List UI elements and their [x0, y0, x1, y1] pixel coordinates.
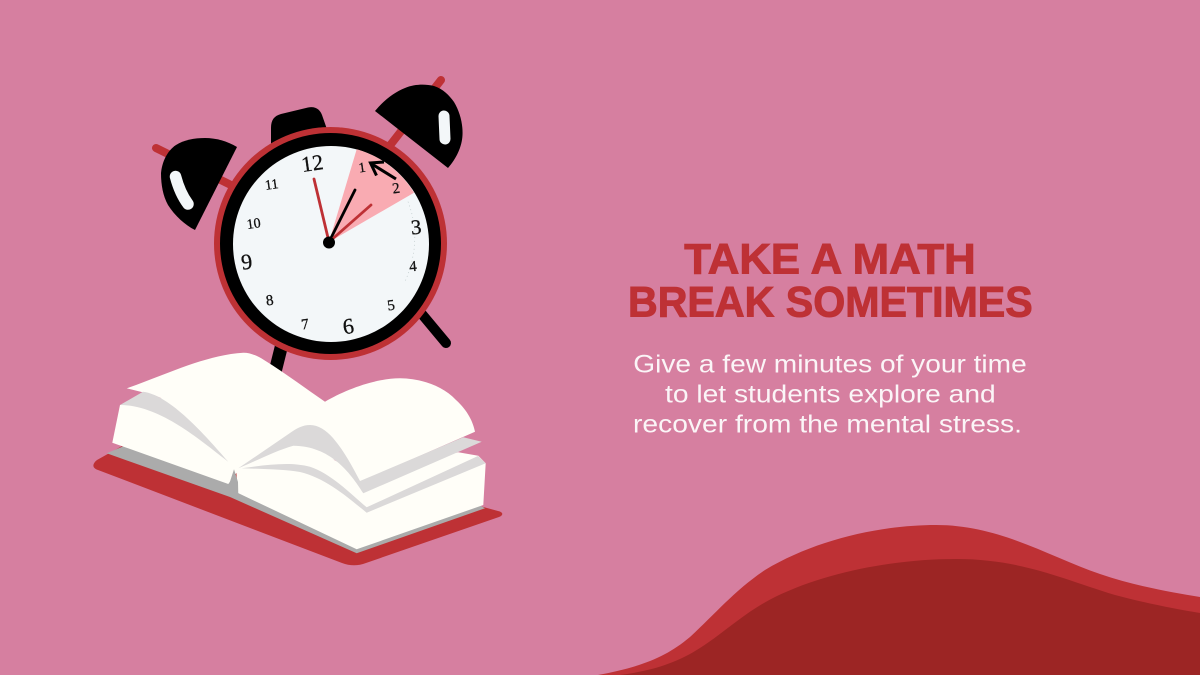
body text: Give a few minutes of your time	[633, 351, 1027, 379]
title: TAKE A MATH	[684, 235, 976, 283]
right page block	[236, 440, 486, 549]
right shadow sheet	[238, 425, 482, 493]
arrow: counter-clockwise	[370, 162, 396, 179]
title	[628, 235, 1033, 327]
clock face	[233, 146, 429, 342]
clock numerals: 8	[265, 293, 275, 309]
clock numerals	[239, 149, 422, 339]
clock numerals: 5	[386, 298, 396, 314]
wave: bottom right decoration	[598, 525, 1200, 675]
clock numerals: 6	[341, 313, 355, 339]
top pages	[127, 353, 475, 482]
clock hands	[314, 179, 371, 242]
icon: right bell	[375, 85, 463, 168]
book cover	[93, 446, 502, 565]
clock numerals: 3	[410, 215, 422, 239]
clock numerals: 4	[409, 259, 418, 275]
illustration: open book	[93, 353, 502, 565]
body text: to let students explore and	[665, 380, 996, 408]
clock numerals: 9	[239, 248, 254, 275]
clock numerals: 11	[264, 177, 280, 194]
illustration: alarm clock	[156, 80, 463, 372]
clock numerals: 7	[300, 317, 310, 333]
bell handles	[156, 80, 441, 187]
clock rim	[214, 127, 447, 360]
body text: recover from the mental stress.	[633, 411, 1022, 439]
highlighted time wedge	[329, 149, 414, 242]
body text	[633, 351, 1027, 439]
left shadow sheet	[120, 392, 228, 462]
lower right shadow sheet	[242, 456, 486, 513]
clock numerals: 1	[358, 161, 367, 176]
clock numerals: 12	[300, 149, 325, 177]
left page block	[112, 395, 240, 484]
title: BREAK SOMETIMES	[628, 279, 1033, 327]
clock legs	[275, 313, 446, 372]
icon: left bell	[161, 138, 237, 230]
spine	[228, 469, 238, 497]
clock numerals: 2	[391, 181, 401, 197]
page edge shadow	[107, 446, 485, 553]
clock numerals: 10	[246, 216, 262, 233]
top knob	[271, 107, 329, 145]
